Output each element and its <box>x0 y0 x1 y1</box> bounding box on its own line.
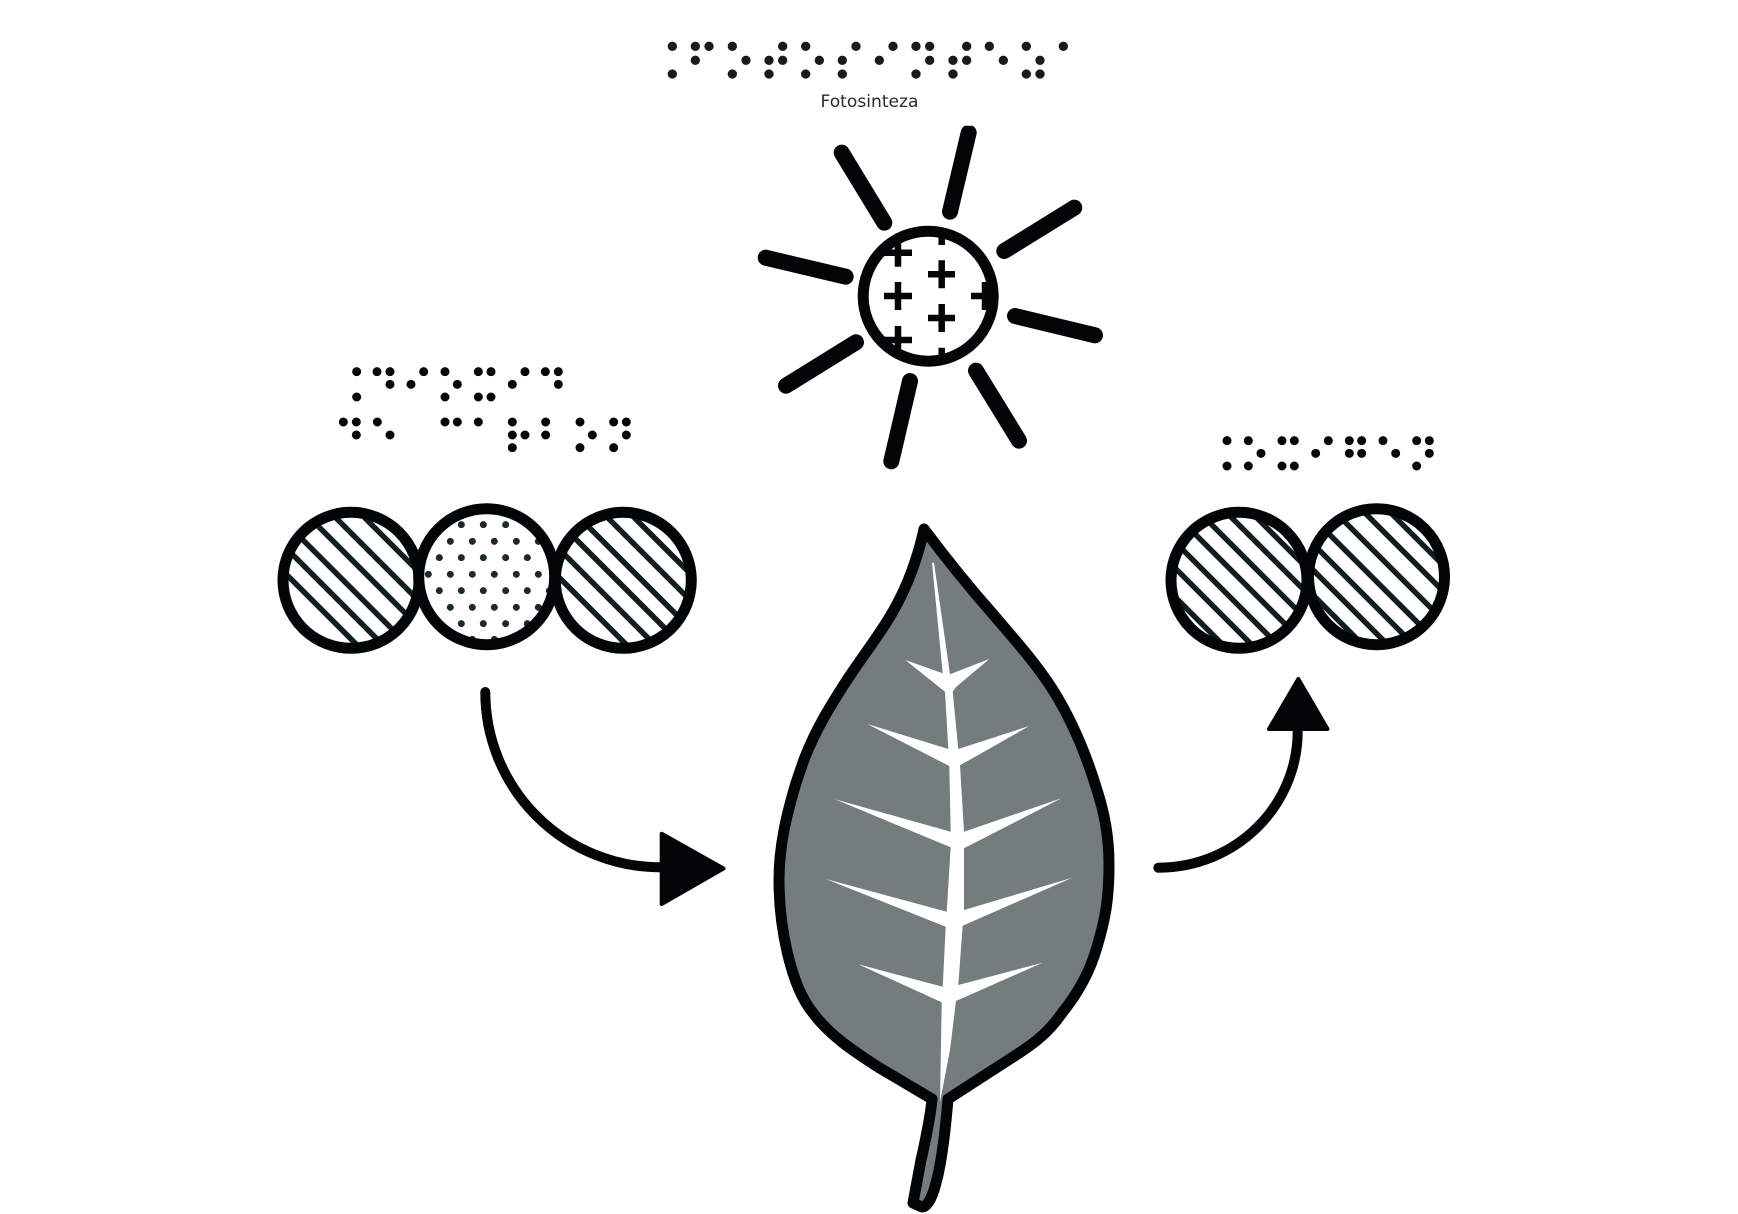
braille title: Fotosinteza <box>672 46 1063 74</box>
infographic: photosynthesis diagram <box>278 42 1450 1212</box>
hatched circle B <box>1307 503 1450 650</box>
arrow: leaf to product molecules <box>1158 679 1328 868</box>
braille label: left molecules <box>343 372 626 448</box>
sun rays <box>766 133 1095 461</box>
braille label: right molecules <box>1227 441 1429 466</box>
leaf veins <box>826 563 1072 1102</box>
hatched circle 1 <box>278 506 420 654</box>
leaf blade and stem <box>779 529 1109 1207</box>
sun plus pattern <box>884 238 988 355</box>
icon: leaf <box>779 529 1109 1207</box>
molecule: two linked circles (right) <box>1166 503 1450 654</box>
sun disc outline <box>863 231 993 361</box>
icon: sun <box>766 133 1095 461</box>
title: Fotosinteza: Fotosinteza <box>820 92 918 112</box>
hatched circle A <box>1166 506 1308 654</box>
molecule: three linked circles (left) <box>278 503 697 654</box>
hatched circle 3 <box>554 506 697 654</box>
arrow: molecules into leaf <box>485 692 724 904</box>
dotted circle 2 <box>419 509 555 645</box>
